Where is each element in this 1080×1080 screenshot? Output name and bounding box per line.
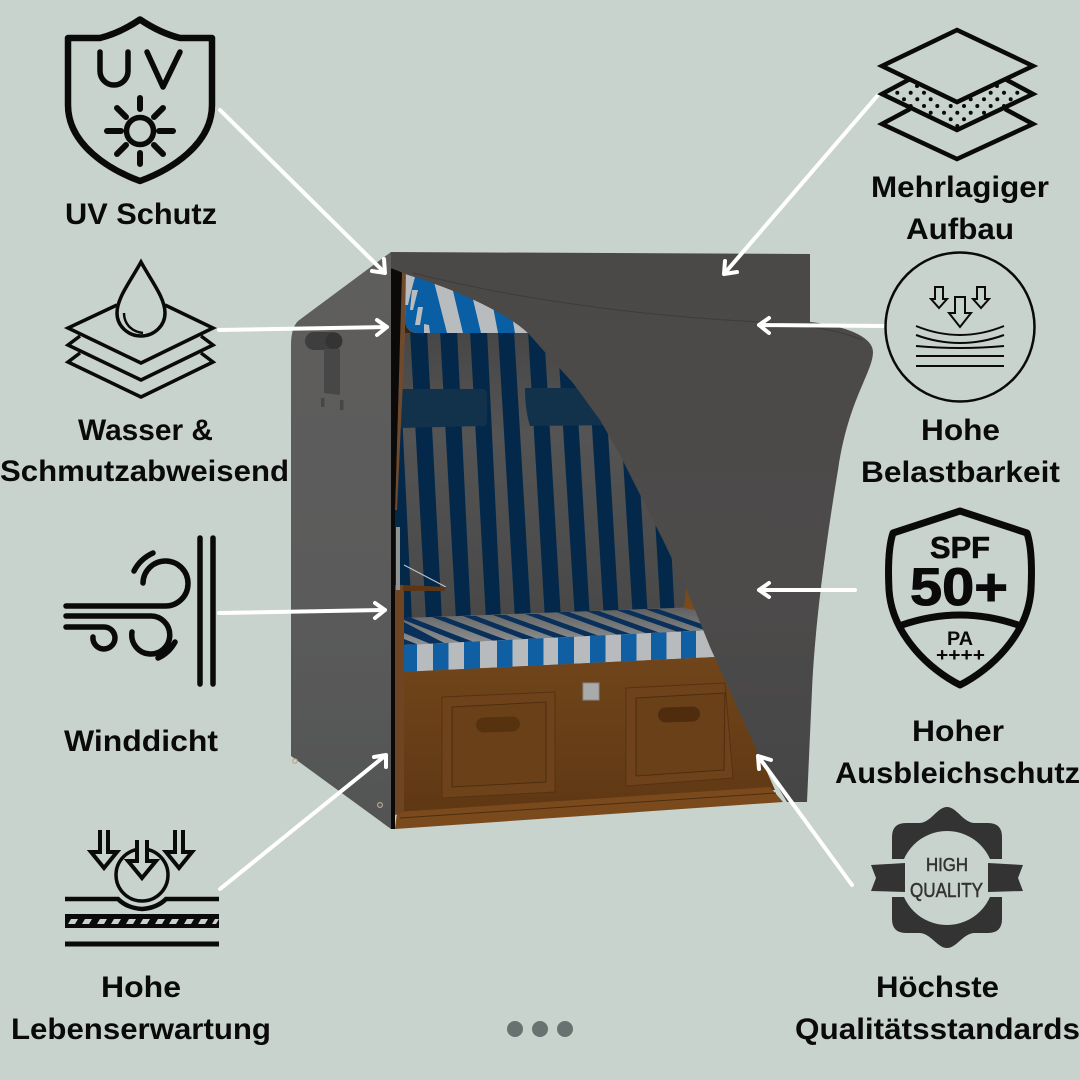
grommets (293, 759, 382, 807)
side mount hook (305, 332, 344, 410)
label: Höchste Qualitätsstandards: Höchste (876, 971, 999, 1004)
cover left side panel (291, 252, 391, 829)
black door edge (391, 268, 402, 829)
label: Höchste Qualitätsstandards (795, 971, 1080, 1046)
arrow: layers (724, 95, 878, 274)
icon: load circle (886, 252, 1034, 402)
seat cushion top (404, 608, 704, 645)
label: Wasser & Schmutzabweisend (0, 414, 289, 488)
label: Wasser & Schmutzabweisend: Wasser & (78, 414, 213, 447)
label: Hoher Ausbleichschutz: Ausbleichschutz (835, 757, 1080, 790)
seat cushion front (404, 630, 714, 672)
wooden base front (400, 657, 775, 812)
arrow: resilience (759, 318, 884, 333)
label: Hohe Lebenserwartung: Lebenserwartung (11, 1013, 271, 1046)
icon: pressure on layers (65, 830, 219, 944)
cover seam (413, 273, 862, 340)
headrest pillows (400, 388, 620, 428)
label: Mehrlagiger Aufbau (871, 171, 1049, 246)
icon: layers (882, 30, 1033, 159)
pagination dots (507, 1021, 573, 1037)
arrow: quality (758, 756, 852, 885)
wooden base plinth (395, 787, 783, 829)
icon: high quality badge: HIGH (926, 855, 968, 875)
right drawer (626, 683, 733, 786)
label: Mehrlagiger Aufbau: Mehrlagiger (871, 171, 1049, 204)
metal latch (583, 683, 599, 700)
icon: SPF 50+ shield: 50+ (910, 558, 1008, 617)
product: covered beach chair (291, 252, 873, 829)
arrow: water (219, 320, 387, 335)
arrow: fade protection (759, 583, 855, 597)
arrow: wind (219, 603, 385, 618)
label: Höchste Qualitätsstandards: Qualitätsstandards (795, 1013, 1080, 1046)
icon: SPF 50+ shield: PA (947, 629, 973, 650)
label: Wasser & Schmutzabweisend: Schmutzabweisend (0, 455, 289, 488)
canopy striped fabric (405, 274, 528, 333)
icon: water drop on layers (68, 262, 213, 397)
label: Winddicht: Winddicht (64, 725, 218, 758)
label: Hoher Ausbleichschutz (835, 715, 1080, 790)
label: Hoher Ausbleichschutz: Hoher (912, 715, 1004, 748)
back wall navy stripes (381, 330, 675, 620)
icon: UV shield (68, 20, 212, 181)
label: Hohe Lebenserwartung (11, 971, 271, 1046)
label: Hohe Belastbarkeit: Hohe (921, 414, 1000, 447)
side shelf (396, 527, 446, 591)
label: Hohe Lebenserwartung: Hohe (101, 971, 181, 1004)
icon: high quality badge (871, 807, 1023, 948)
arrow: lifespan (220, 755, 386, 889)
main cover front drape (391, 252, 873, 802)
chair interior back wall (395, 270, 735, 680)
arrow: UV (220, 110, 385, 273)
left drawer (442, 692, 555, 798)
icon: SPF 50+ shield: SPF (930, 530, 990, 565)
label: Mehrlagiger Aufbau: Aufbau (906, 213, 1014, 246)
canopy corner shadow (405, 318, 419, 333)
wooden side post (395, 272, 408, 510)
icon: wind against wall (66, 538, 213, 684)
label: UV Schutz: UV Schutz (65, 198, 217, 231)
icon: SPF 50+ shield: ++++ (936, 645, 985, 665)
icon: high quality badge: QUALITY (910, 880, 983, 902)
lower wooden post (395, 585, 404, 815)
label: Hohe Belastbarkeit: Belastbarkeit (861, 456, 1060, 489)
label: Hohe Belastbarkeit (861, 414, 1060, 489)
small wood piece right (684, 588, 695, 610)
icon: SPF 50+ shield (888, 511, 1032, 685)
